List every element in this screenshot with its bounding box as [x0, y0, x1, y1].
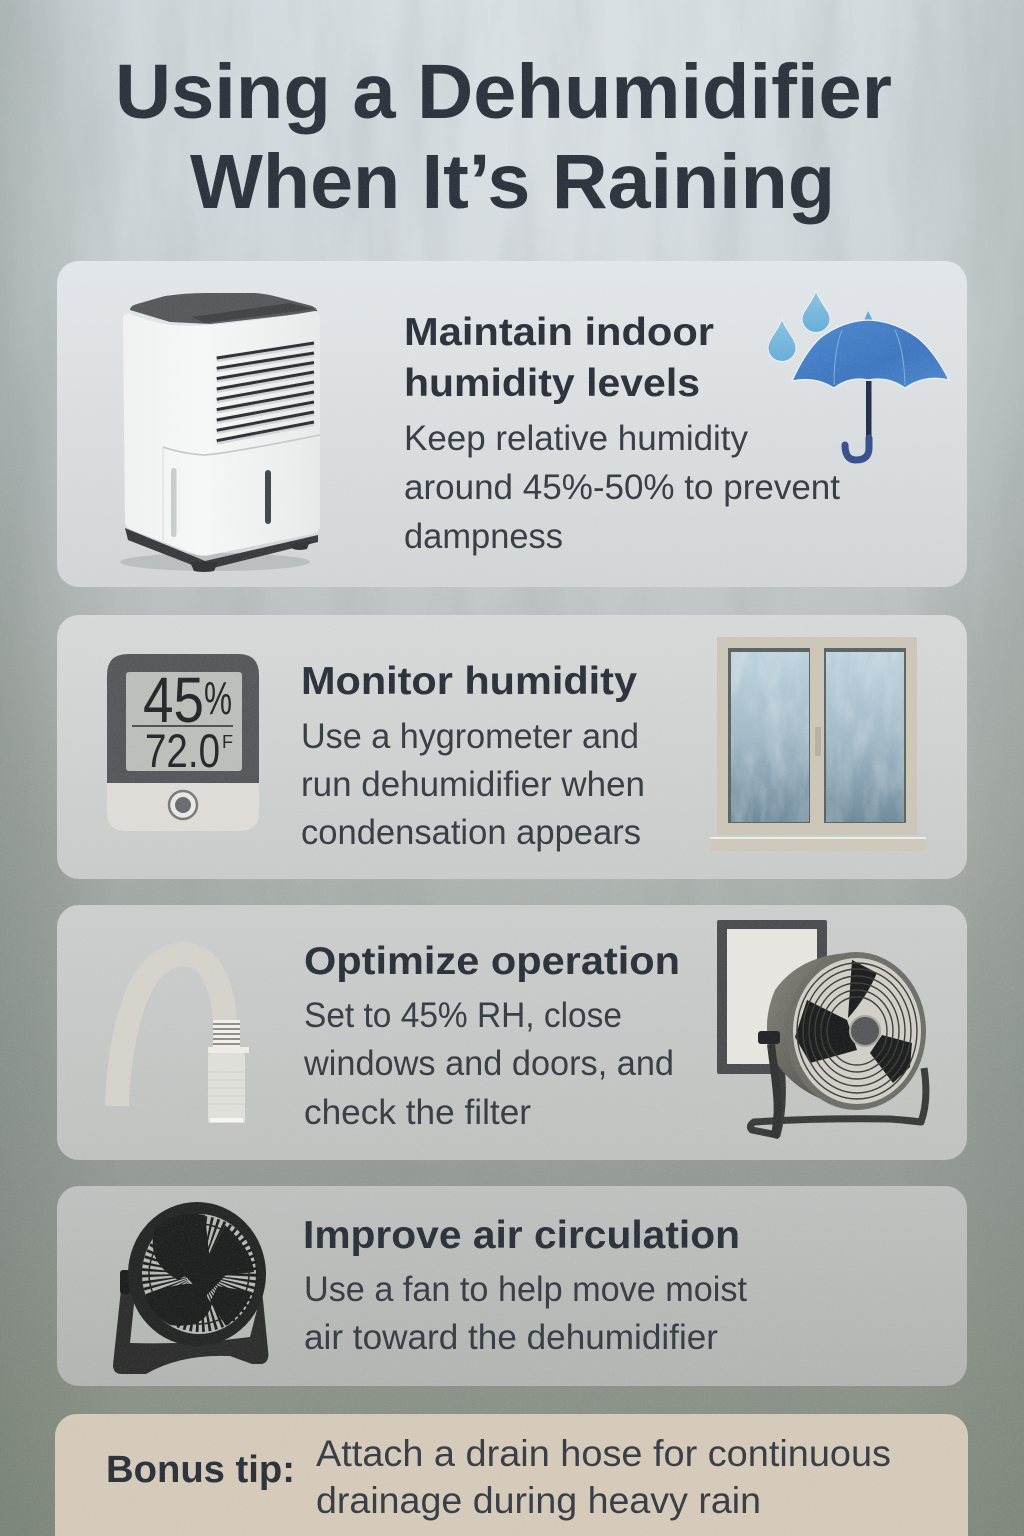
title: Using a Dehumidifier	[115, 49, 892, 135]
body text: dampness	[404, 517, 563, 556]
panel: monitor humidity	[57, 615, 967, 879]
title: When It’s Raining	[190, 139, 835, 225]
icon: umbrella with rain drops	[768, 291, 949, 460]
body text: Keep relative humidity	[404, 419, 748, 458]
heading: Optimize operation	[304, 940, 680, 983]
body text: Use a hygrometer and	[301, 717, 639, 756]
panel: maintain indoor humidity levels	[57, 261, 967, 587]
body text: Use a fan to help move moist	[304, 1270, 747, 1309]
heading: Maintain indoor	[404, 311, 714, 354]
heading: Monitor humidity	[301, 660, 637, 703]
panel: bonus tip	[55, 1414, 968, 1536]
bonus text	[316, 1433, 891, 1521]
panel: optimize operation	[57, 905, 967, 1160]
icon: hygrometer: %	[204, 672, 232, 724]
heading: Improve air circulation	[303, 1214, 740, 1257]
body text: air toward the dehumidifier	[304, 1318, 718, 1357]
icon: floor fan with metal grille	[750, 952, 926, 1138]
bonus label: Bonus tip:	[106, 1449, 295, 1491]
body text: check the filter	[304, 1093, 531, 1132]
icon: hygrometer: 45	[143, 664, 204, 736]
vents	[217, 346, 314, 443]
body text: windows and doors, and	[303, 1044, 674, 1083]
body text: Set to 45% RH, close	[304, 996, 622, 1035]
body text: run dehumidifier when	[301, 765, 645, 804]
body text	[304, 1270, 747, 1357]
body text	[303, 996, 674, 1132]
bonus text: drainage during heavy rain	[316, 1480, 761, 1521]
icon: dehumidifier	[120, 293, 320, 572]
title	[115, 49, 892, 225]
body text	[404, 419, 840, 556]
icon: hygrometer	[107, 654, 259, 831]
panel: improve air circulation	[57, 1186, 967, 1386]
icon: hygrometer: 72.0	[145, 724, 220, 777]
icon: black floor fan	[113, 1202, 268, 1374]
heading	[404, 311, 714, 405]
body text	[301, 717, 645, 852]
icon: air filter	[717, 920, 827, 1074]
icon: drain hose	[117, 954, 249, 1123]
body text: around 45%-50% to prevent	[404, 468, 840, 507]
icon: window with condensation	[710, 637, 926, 851]
body text: condensation appears	[301, 813, 641, 852]
bonus text: Attach a drain hose for continuous	[316, 1433, 891, 1474]
heading: humidity levels	[404, 362, 700, 405]
icon: hygrometer: F	[222, 732, 233, 752]
